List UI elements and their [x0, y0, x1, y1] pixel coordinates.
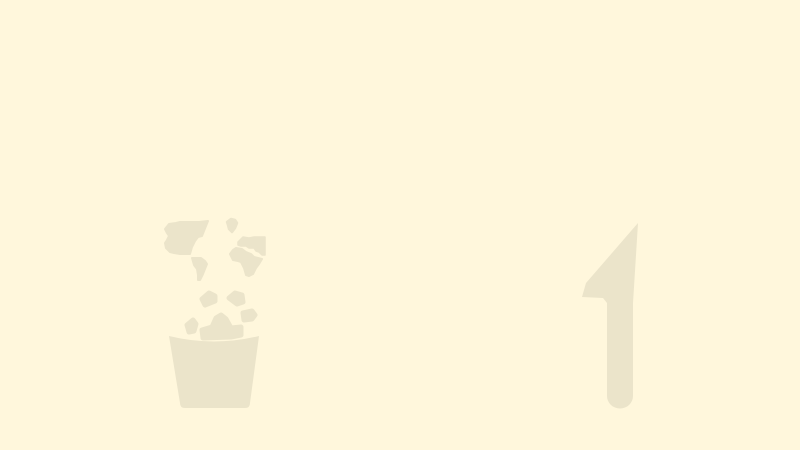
map: South America: [192, 258, 207, 280]
map: North America: [165, 221, 208, 254]
map: Africa: [230, 248, 262, 276]
icon: knife pointing upward: [582, 223, 638, 408]
map: Greenland: [227, 219, 237, 232]
map: Eurasia: [238, 237, 265, 255]
bucket: [169, 336, 259, 408]
crumb: left: [187, 320, 196, 332]
crumb pile: [202, 315, 241, 338]
crumb: upper right: [229, 293, 243, 304]
crumb: upper left: [202, 293, 215, 305]
crumb: right: [243, 311, 255, 320]
icon: world map breaking apart into a bucket: [165, 219, 265, 408]
